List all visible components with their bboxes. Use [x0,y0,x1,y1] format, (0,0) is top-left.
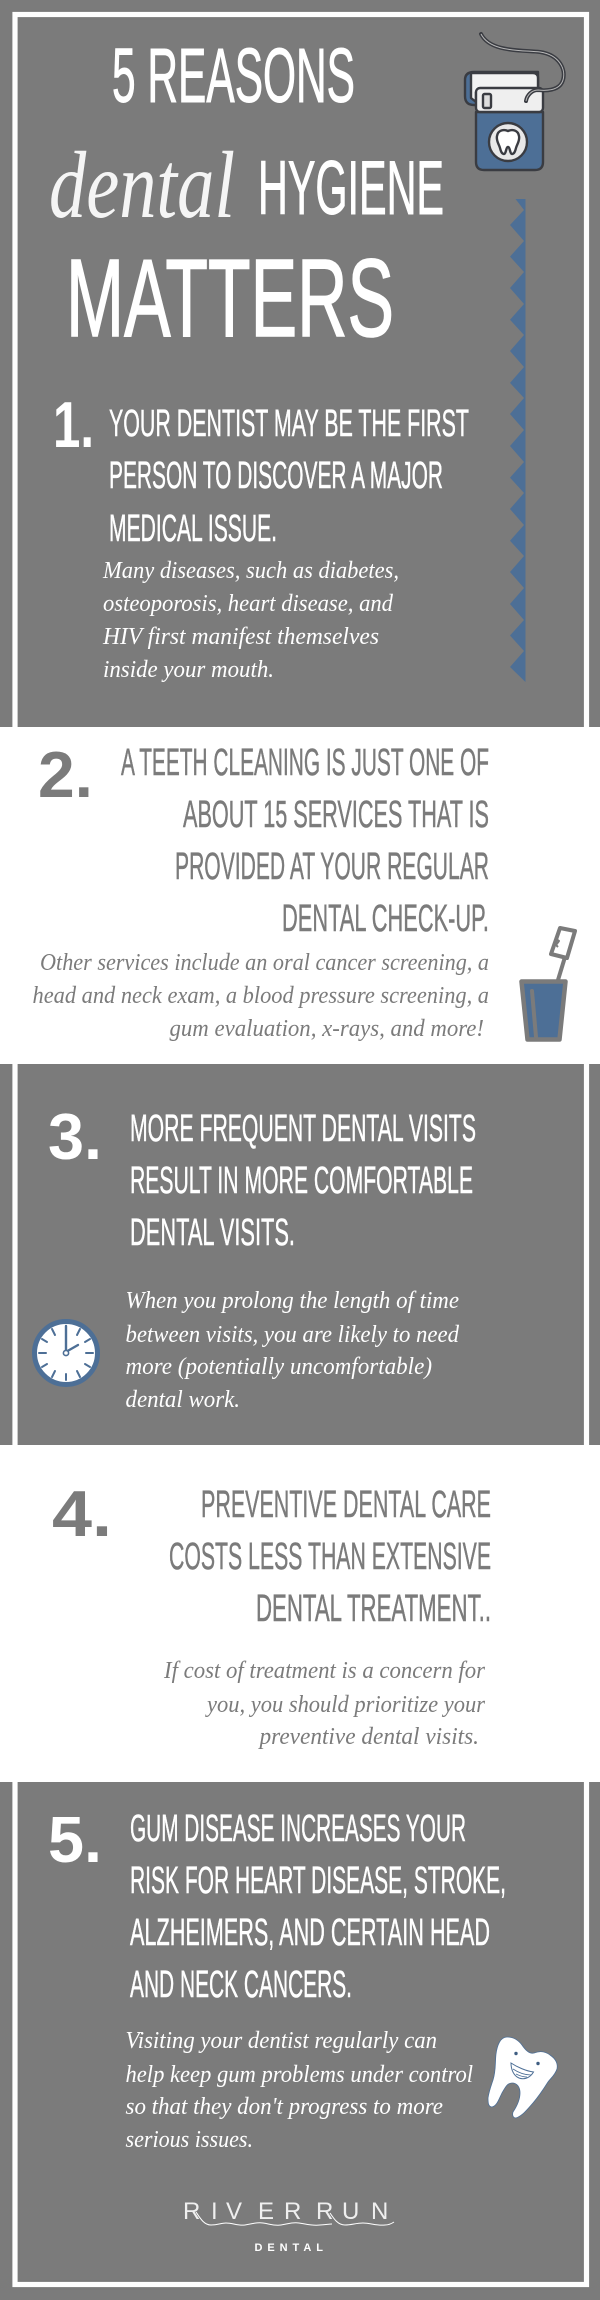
body text: reason 4: preventive dental visits. [258,1724,479,1750]
body text: reason 5: help keep gum problems under control [126,2062,473,2088]
body text: reason 3 [126,1288,460,1413]
number 3: 3. [48,1100,102,1173]
number 5: 5. [48,1803,102,1876]
logo: River Run Dental [183,2198,394,2254]
body text: reason 3: between visits, you are likely to need [126,1322,460,1348]
icon: clock [34,1322,98,1384]
panel: reason 4 background [0,1445,600,1782]
body text: reason 4: If cost of treatment is a concern for [163,1658,486,1684]
number 1: 1. [53,388,94,461]
body text: reason 3: dental work. [126,1387,240,1413]
heading: reason 5 [130,1808,506,2006]
body text: reason 4: you, you should prioritize your [205,1692,486,1718]
title word: hygiene: HYGIENE [258,146,444,231]
body text: reason 1: osteoporosis, heart disease, and [103,591,394,617]
logo wave line [196,2212,394,2225]
title line: 5 reasons: 5 REASONS [112,33,355,119]
title word: dental script: dental [49,132,235,238]
number 4: 4. [52,1477,112,1550]
section: reason 2 [32,738,489,1042]
body text: reason 4 [163,1658,486,1750]
body text: reason 5: Visiting your dentist regularly can [126,2028,437,2054]
heading: reason 4 [169,1484,491,1630]
number 2: 2. [38,738,93,811]
body text: reason 1: inside your mouth. [103,657,274,683]
body text: reason 5: so that they don't progress to more [126,2094,443,2120]
body text: reason 2: Other services include an oral cancer screening, a [40,950,489,976]
section: reason 1 [53,388,469,683]
body text: reason 5: serious issues. [126,2127,253,2153]
heading: reason 3 [130,1108,476,1254]
section: reason 4 [52,1477,491,1750]
body text: reason 5 [126,2028,473,2153]
title word: matters: MATTERS [66,237,394,360]
heading: reason 3: DENTAL VISITS. [130,1212,295,1254]
logo wordmark: RIVERRUN [183,2198,388,2225]
heading: reason 1: MEDICAL ISSUE. [109,508,277,550]
section: reason 5 [48,1803,506,2153]
body text: reason 2: gum evaluation, x-rays, and more! [170,1016,484,1042]
heading: reason 2 [121,742,489,940]
icon: toothbrush in glass [522,928,575,1040]
icon: smiling tooth [488,2037,557,2118]
decorative blue zigzag column [510,199,526,682]
body text: reason 3: When you prolong the length of time [126,1288,459,1314]
body text: reason 1 [102,558,399,683]
title [49,33,444,360]
body text: reason 1: Many diseases, such as diabetes, [102,558,399,584]
icon: dental floss box [465,34,564,170]
body text: reason 2: head and neck exam, a blood pressure screening, a [32,983,489,1009]
body text: reason 2 [32,950,489,1042]
heading: reason 5: AND NECK CANCERS. [130,1964,352,2006]
panel: reason 2 background [0,727,600,1064]
heading: reason 1 [109,403,469,550]
body text: reason 1: HIV first manifest themselves [102,624,379,650]
logo subtitle: DENTAL [254,2242,323,2254]
body text: reason 3: more (potentially uncomfortable) [126,1354,432,1380]
section: reason 3 [48,1100,476,1413]
